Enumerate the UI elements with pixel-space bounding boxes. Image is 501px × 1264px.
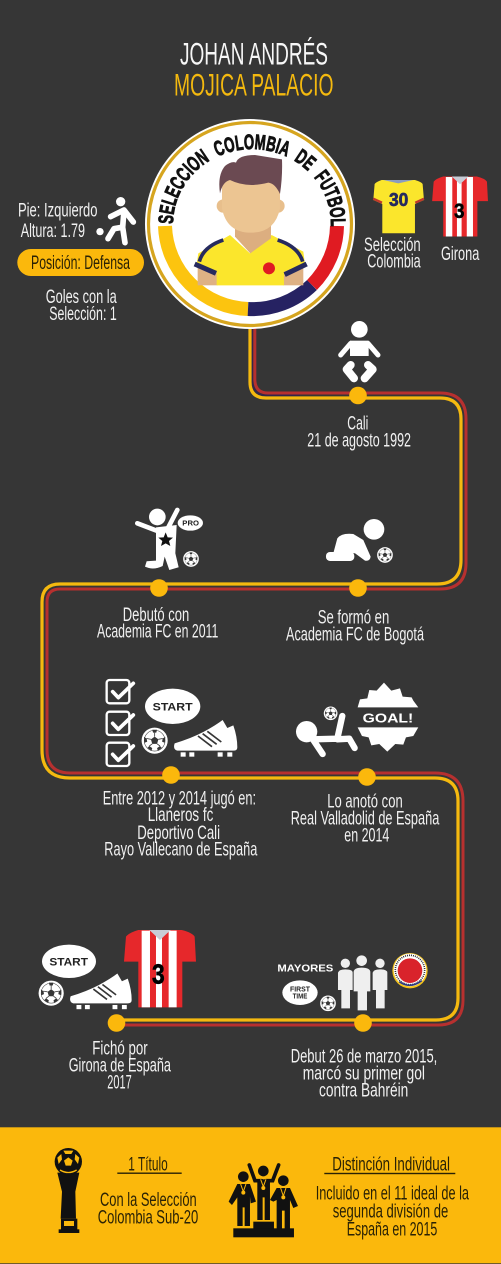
birth text (307, 412, 411, 452)
three players (338, 955, 387, 1011)
goals text (46, 286, 117, 325)
icon: start, ball, boot, Girona jersey: 3 (152, 959, 165, 990)
jersey: Colombia: 30 (389, 189, 408, 210)
distinction heading (324, 1154, 455, 1176)
colour arc (165, 226, 337, 309)
goals text: Selección: 1 (49, 303, 117, 325)
debut national team text: contra Bahréin (319, 1080, 408, 1102)
icon: player kicking ball (96, 197, 133, 243)
icon: baby (341, 321, 378, 378)
distinction description (316, 1182, 469, 1241)
Colombia crest (392, 953, 428, 988)
academy text (286, 606, 424, 646)
title description (98, 1189, 198, 1228)
Girona text: Girona de España (69, 1055, 171, 1077)
goal text: en 2014 (344, 825, 389, 847)
player portrait (195, 155, 307, 285)
distinction description: segunda división de (333, 1200, 448, 1222)
academy text: Academia FC de Bogotá (286, 624, 424, 646)
timeline markers (108, 387, 376, 1032)
goal text (291, 791, 439, 847)
academy text: Se formó en (318, 606, 389, 628)
distinction description: España en 2015 (347, 1219, 437, 1241)
icon: start, ball, boot, Girona jersey: START (49, 956, 89, 968)
icon: crawling baby with ball (326, 519, 393, 563)
icon: checklist, start, ball, boot (107, 680, 237, 766)
career text: Rayo Vallecano de España (104, 839, 257, 861)
player stats (18, 200, 98, 242)
jersey labels (364, 234, 479, 273)
timeline path (42, 326, 466, 1025)
title text: 1 título: 1 Título (128, 1154, 168, 1176)
icon: national team debut: MAYORES (277, 964, 334, 975)
icon: checklist, start, ball, boot: START (153, 702, 193, 714)
title: JOHAN ANDRÉS (180, 35, 328, 71)
icon: national team debut: FIRST (290, 986, 311, 993)
position pill (17, 249, 144, 276)
jersey: Girona (432, 176, 488, 236)
title description: Colombia Sub-20 (98, 1206, 198, 1228)
player stats: Altura: 1.79 (21, 220, 85, 242)
debut national team text (291, 1046, 437, 1102)
birth text: 21 de agosto 1992 (307, 430, 411, 452)
debut national team text: marcó su primer gol (303, 1062, 425, 1084)
debut text: Academia FC en 2011 (97, 621, 218, 643)
title description: Con la Selección (100, 1189, 197, 1211)
Girona text (69, 1037, 171, 1093)
icon: goal scorer: GOAL! (363, 711, 413, 726)
goal text: Lo anotó con (327, 791, 403, 813)
career text: Deportivo Cali (137, 822, 220, 844)
curved badge text: SELECCION COLOMBIA DE FUTBOL (158, 134, 346, 226)
goals text: Goles con la (46, 286, 117, 308)
icon: pro player (137, 509, 203, 570)
icon: pro player: PRO (182, 521, 200, 528)
career text: Llaneros fc (148, 804, 213, 826)
jersey labels: Girona (441, 243, 479, 265)
icon: start, ball, boot, Girona jersey (39, 930, 196, 1009)
career text: Entre 2012 y 2014 jugó en: (103, 787, 256, 809)
medallion (145, 119, 355, 329)
jersey: Colombia (373, 180, 424, 233)
Girona text: 2017 (107, 1071, 132, 1093)
Girona text: Fichó por (92, 1037, 148, 1059)
birth text: Cali (347, 412, 368, 434)
title: MOJICA PALACIO (174, 67, 334, 103)
title (174, 35, 334, 103)
icon: national team debut: TIME (293, 994, 308, 1001)
icon: goal scorer (296, 683, 418, 754)
panel: honours band (0, 1127, 501, 1263)
position pill: Posición: Defensa (31, 252, 130, 274)
jersey labels: Selección (364, 234, 421, 256)
icon: national team debut (277, 953, 428, 1011)
debut text (97, 604, 218, 643)
distinction heading: Distinción Individual (332, 1154, 450, 1176)
player stats: Pie: Izquierdo (18, 200, 98, 222)
icon: trophy (55, 1148, 82, 1233)
icon: podium (229, 1165, 298, 1237)
debut text: Debutó con (123, 604, 189, 626)
jersey: Girona: 3 (454, 200, 464, 223)
career text (103, 787, 257, 861)
jersey labels: Colombia (367, 251, 421, 273)
